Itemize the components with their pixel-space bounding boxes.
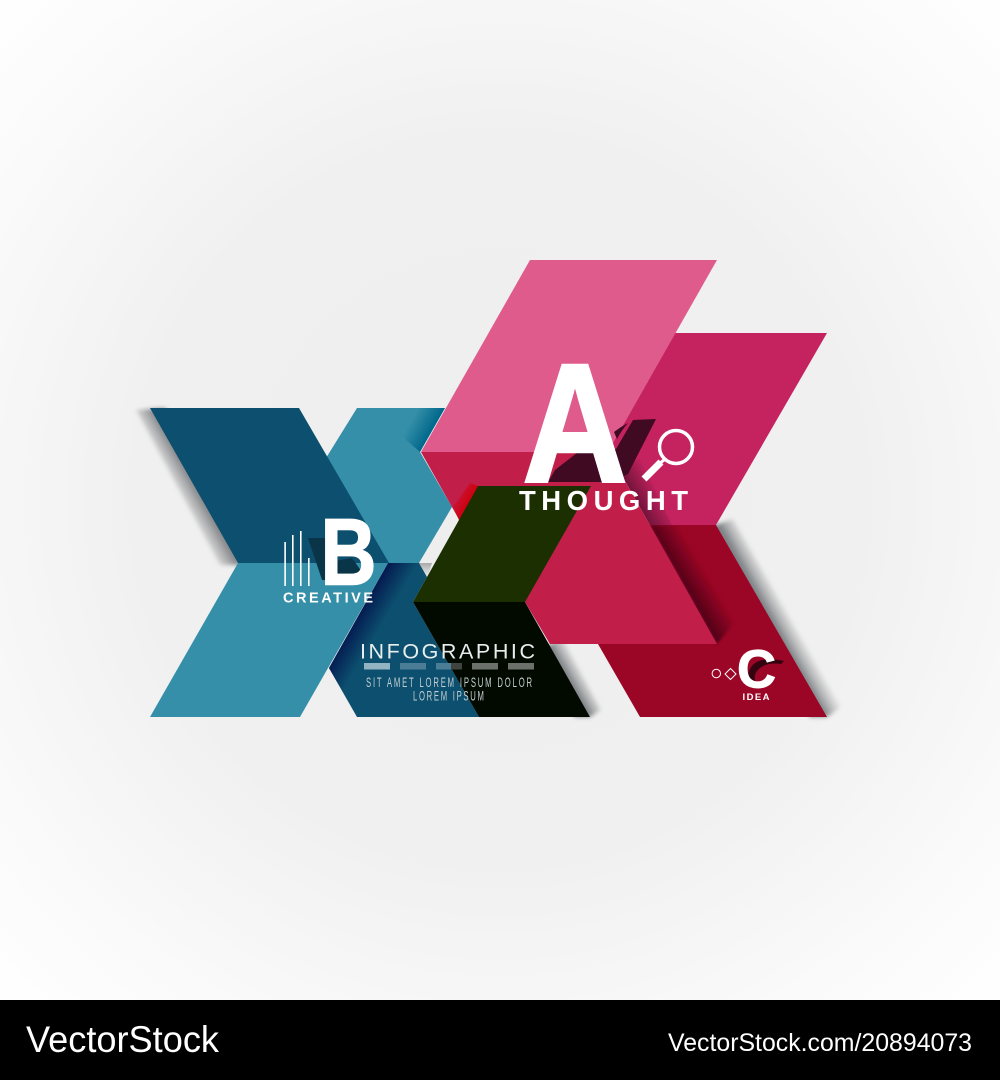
shadow: crimson over dark red [650, 525, 738, 644]
icon: magnifying glass [644, 430, 692, 479]
caption line 2: LOREM IPSUM [413, 689, 484, 704]
letter block: B CREATIVE [283, 500, 376, 606]
shape: lower teal arm [150, 563, 388, 717]
watermark: image id: VectorStock.com/20894073 [668, 1029, 972, 1057]
icon: circle [712, 669, 720, 678]
letter A: A [522, 328, 628, 518]
shadow: letter A [548, 419, 656, 482]
panel: A arrow, pink and crimson [421, 260, 827, 644]
shape: upper teal arm [300, 408, 452, 563]
caption line 1: SIT AMET LOREM IPSUM DOLOR [366, 676, 532, 691]
text block: INFOGRAPHIC [360, 640, 535, 704]
shape: dark red arm [598, 525, 827, 717]
label: THOUGHT: THOUGHT [519, 485, 688, 516]
letter block: C IDEA [712, 640, 784, 703]
label: IDEA: IDEA [742, 692, 770, 703]
heading: INFOGRAPHIC: INFOGRAPHIC [360, 640, 535, 664]
shadow: on magenta [619, 458, 672, 525]
shape: upper dark blue arm [150, 408, 389, 563]
letter C: C [737, 640, 776, 700]
letter block: A THOUGHT [519, 328, 692, 518]
shadow: letter C [748, 659, 784, 684]
icon: diamond [725, 668, 736, 680]
shape: pink arm [421, 260, 717, 452]
icon: vertical bars [284, 531, 310, 586]
shadow: teal over dark blue [329, 563, 479, 717]
label: CREATIVE: CREATIVE [283, 590, 373, 606]
shape: crimson arm [421, 452, 717, 644]
shape: green arm [413, 486, 591, 602]
shadow: pink over teal [395, 408, 445, 452]
shape: black arm [413, 602, 590, 717]
panel: centre, green and black [413, 486, 591, 717]
watermark: brand name: VectorStock [26, 1019, 219, 1060]
shape: lower dark blue arm [329, 563, 479, 717]
panel: B arrow, teal and dark blue [150, 408, 479, 717]
letter B: B [320, 500, 376, 606]
shape: magenta arm [608, 333, 827, 525]
shadow: letter B [308, 538, 362, 580]
bar row [364, 663, 534, 670]
shadow: cast by the shapes on the background [136, 408, 841, 717]
shadow: green over crimson [453, 483, 478, 520]
watermark bar [0, 1000, 1000, 1080]
panel: C arrow, dark red [598, 525, 827, 717]
